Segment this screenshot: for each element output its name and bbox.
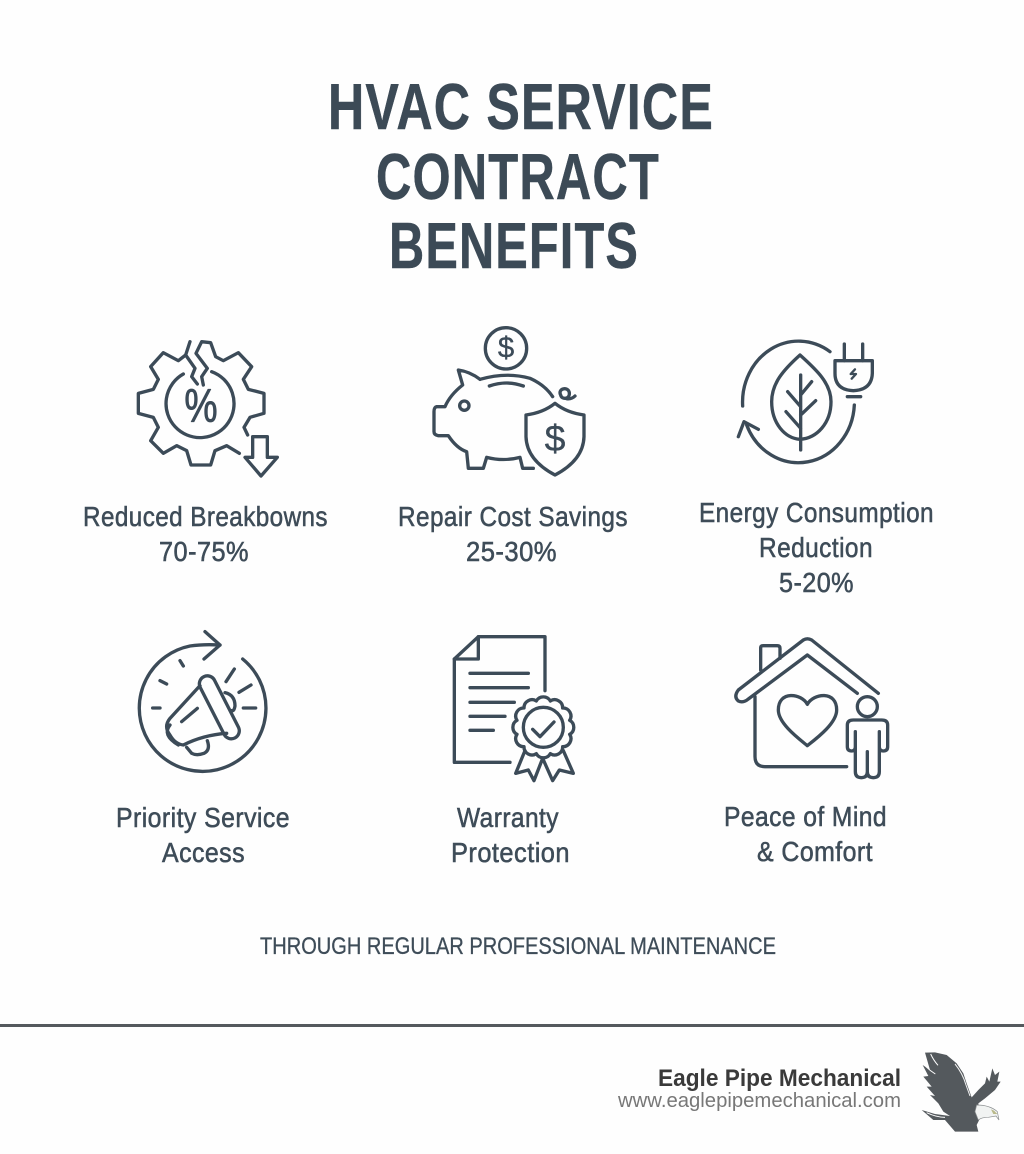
label: reduced breakdowns: 70-75% [159, 536, 249, 567]
footer company name: Eagle Pipe Mechanical [658, 1065, 901, 1092]
icon: house with heart and person [736, 639, 888, 778]
label: energy consumption reduction [699, 497, 934, 598]
label: repair cost savings [398, 501, 628, 567]
label: energy consumption reduction: Reduction [759, 532, 873, 563]
label: peace of mind and comfort: Peace of Mind [724, 801, 887, 832]
label: warranty protection: Protection [451, 837, 570, 868]
icon: piggy bank with coin and shield: $ [545, 417, 566, 459]
title: CONTRACT [376, 140, 660, 213]
label: repair cost savings: 25-30% [466, 536, 557, 567]
icon: warranty document with rosette [454, 637, 574, 781]
label: energy consumption reduction: Energy Consumption [699, 497, 934, 528]
logo: eagle [922, 1052, 1001, 1132]
label: reduced breakdowns: Reduced Breakbowns [83, 501, 328, 532]
label: warranty protection: Warranty [457, 802, 559, 833]
title: HVAC SERVICE [328, 70, 714, 143]
icon: cracked gear with percent and down arrow: % [184, 380, 218, 432]
label: warranty protection [451, 802, 570, 868]
label: repair cost savings: Repair Cost Savings [398, 501, 628, 532]
icon: leaf, energy cycle and plug [738, 341, 872, 463]
footer website: www.eaglepipemechanical.com [617, 1090, 901, 1112]
title: BENEFITS [389, 209, 639, 282]
icon: piggy bank with coin and shield [434, 328, 584, 475]
label: peace of mind and comfort: & Comfort [757, 836, 873, 867]
label: reduced breakdowns [83, 501, 328, 567]
label: priority service access [116, 802, 290, 868]
icon: megaphone in circular arrow [139, 632, 266, 771]
label: priority service access: Access [162, 837, 245, 868]
title [328, 70, 714, 282]
tagline: THROUGH REGULAR PROFESSIONAL MAINTENANCE [260, 933, 776, 960]
label: peace of mind and comfort [724, 801, 887, 867]
icon: cracked gear with percent and down arrow [138, 342, 277, 476]
icon: piggy bank with coin and shield: $ [498, 331, 514, 364]
label: priority service access: Priority Service [116, 802, 290, 833]
label: energy consumption reduction: 5-20% [779, 567, 854, 598]
